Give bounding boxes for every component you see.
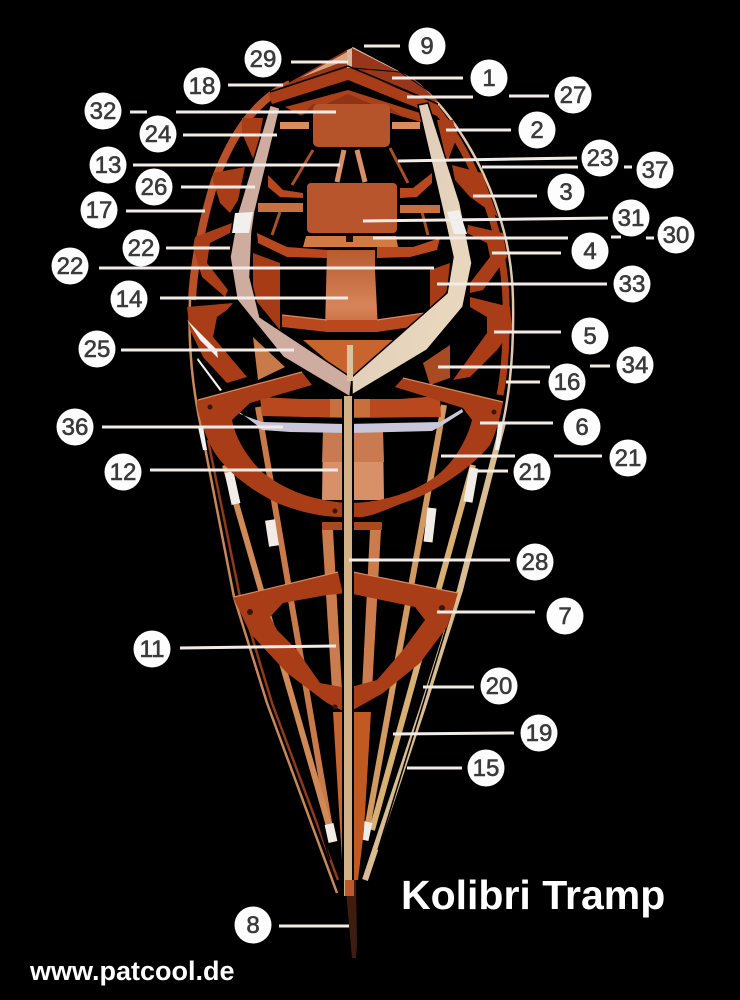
upper plank [325, 250, 378, 330]
label 9: 9 [420, 33, 434, 60]
coaming: left [230, 105, 352, 397]
label 27: 27 [560, 82, 586, 109]
label 6 [480, 408, 600, 446]
frame 6 beam [260, 396, 441, 418]
label 26: 26 [141, 174, 167, 201]
bolts and joints [208, 404, 496, 710]
label 8: 8 [246, 912, 260, 939]
label 20 [423, 668, 518, 704]
label 29 [244, 40, 348, 78]
label 21 outer: 21 [615, 445, 641, 472]
label 36: 36 [62, 414, 88, 441]
website credit: www.patcool.de [29, 956, 235, 986]
metal strap [238, 409, 463, 433]
cross beams [257, 173, 440, 376]
label 16 [506, 364, 586, 400]
title: Kolibri Tramp [401, 872, 665, 918]
label 21 inner: 21 [519, 459, 545, 486]
label 2 [446, 112, 556, 148]
label 4 [492, 232, 608, 270]
label 18 [184, 68, 283, 104]
label 23 [398, 140, 618, 176]
label 11: 11 [140, 636, 164, 663]
joint plates [232, 210, 467, 234]
label 21 inner [441, 454, 550, 490]
label 16: 16 [554, 369, 580, 396]
label 28 [349, 544, 554, 580]
label 19 [393, 714, 558, 752]
label 32 [84, 92, 336, 130]
label 5: 5 [583, 323, 597, 350]
label 17 [80, 192, 205, 228]
label 37 [624, 152, 674, 188]
label 33: 33 [619, 271, 645, 298]
label 22 upper: 22 [128, 235, 154, 262]
label 11 [134, 630, 336, 668]
label 34 [438, 346, 654, 384]
keel strip [342, 345, 354, 896]
bow deck [268, 48, 440, 123]
label 1 [392, 60, 508, 96]
label 1: 1 [482, 65, 496, 92]
label 37: 37 [642, 157, 668, 184]
label 31: 31 [618, 205, 644, 232]
label 9 [364, 28, 446, 64]
label 31 [363, 200, 650, 236]
label 26 [136, 168, 255, 206]
label 33 [437, 266, 650, 302]
label 19: 19 [526, 720, 552, 747]
label 14 [110, 280, 348, 318]
label 18: 18 [189, 73, 215, 100]
label 6: 6 [575, 414, 589, 441]
seat struts [272, 148, 428, 235]
label 25 [78, 330, 294, 368]
label 12 [104, 454, 338, 490]
seat: rear [303, 183, 398, 247]
label 30: 30 [663, 222, 689, 249]
stern post [345, 880, 357, 958]
label 29: 29 [250, 46, 276, 73]
label 36 [56, 408, 283, 446]
label 30 [373, 216, 694, 254]
label 15 [407, 750, 504, 786]
coaming: right [352, 103, 472, 395]
side boards [253, 253, 450, 385]
label 14: 14 [116, 286, 142, 313]
label 22 upper [122, 230, 230, 266]
label 13: 13 [95, 152, 121, 179]
label 24: 24 [145, 121, 171, 148]
hull rim [190, 48, 513, 893]
label 22 lower: 22 [57, 253, 83, 280]
label 20: 20 [486, 673, 512, 700]
label 3 [473, 174, 584, 210]
label 23: 23 [587, 145, 613, 172]
label 24 [140, 116, 277, 152]
boat frame [187, 48, 513, 958]
center keelson [322, 432, 384, 880]
white accents [187, 320, 503, 450]
label 25: 25 [84, 336, 110, 363]
label 5 [494, 318, 608, 354]
frame 6 [197, 372, 503, 517]
label 12: 12 [110, 459, 136, 486]
label 27 [407, 76, 592, 114]
label 7 [437, 598, 584, 634]
label 13 [90, 146, 340, 184]
label 15: 15 [473, 755, 499, 782]
seat bars [258, 122, 440, 213]
frame highlights [198, 313, 503, 597]
label 28: 28 [522, 549, 548, 576]
label 7: 7 [558, 603, 572, 630]
label 22 lower [52, 248, 434, 284]
frame 7 [233, 572, 458, 712]
label 21 outer [554, 440, 646, 476]
label 3: 3 [559, 179, 573, 206]
label 32: 32 [90, 98, 116, 125]
lower stringers [225, 405, 474, 860]
label 2: 2 [530, 117, 544, 144]
label 8 [234, 906, 349, 944]
label 4: 4 [583, 238, 597, 265]
label 34: 34 [622, 352, 648, 379]
seat: front [313, 104, 390, 147]
label 17: 17 [86, 197, 112, 224]
forward ribs [187, 118, 512, 383]
